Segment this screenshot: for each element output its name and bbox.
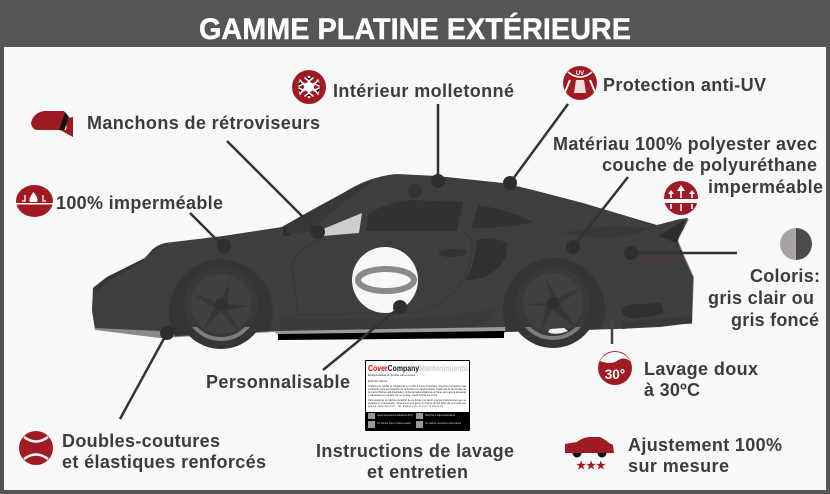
icon: 30 degree wash: 30°: [605, 367, 625, 382]
car illustration: [92, 174, 694, 364]
leader line: lavage: [611, 320, 613, 344]
label: instructions: [316, 441, 514, 482]
icon: reinforced double stitching: [19, 431, 53, 465]
care instructions card: [365, 360, 470, 431]
icon: snowflake: [292, 70, 326, 104]
care instructions card: plena satisfacción. El Equipo de Cover Company: [368, 405, 444, 408]
label: matériau: [553, 134, 823, 197]
label: matériau: imperméable: [708, 177, 823, 197]
door window: [366, 200, 463, 231]
care instructions card: Estimado Cliente,: [368, 380, 388, 383]
label: protection: Protection anti-UV: [603, 75, 766, 95]
icon: 30 degree wash: [598, 351, 632, 385]
door outline: [292, 232, 472, 315]
quarter window: [323, 213, 362, 236]
label: matériau: couche de polyuréthane: [602, 155, 817, 175]
icon: fitted car with stars: [565, 437, 614, 472]
label: matériau: Matériau 100% polyester avec: [553, 134, 817, 154]
label: ajustement: sur mesure: [628, 456, 729, 476]
care instructions card: exclusivos para la protección de vehículos es nuestra pasión. Cada una de las fundas de: [368, 388, 467, 391]
leader line: intérieur: [408, 104, 445, 198]
label: instructions: Instructions de lavage: [316, 441, 514, 461]
care instructions card: CoverCompanyMantenimiento: [368, 363, 468, 373]
label: lavage: Lavage doux: [644, 359, 758, 379]
tail lamp: [637, 250, 682, 262]
label: coloris: gris clair ou: [708, 288, 814, 308]
logo badge: [352, 247, 418, 313]
label: manchons: Manchons de rétroviseurs: [87, 113, 320, 133]
leader line: coutures: [120, 326, 174, 419]
rear wheel: [518, 273, 590, 348]
label: lavage: à 30ºC: [644, 380, 700, 400]
label: coloris: [708, 266, 820, 330]
care instructions card: Planchar a baja temperatura: [425, 414, 456, 417]
leader line: personnalisable: [323, 300, 407, 370]
side skirt: [276, 327, 505, 340]
leader line: anti-UV: [503, 104, 568, 190]
leader line: rétroviseurs: [227, 141, 325, 239]
title: GAMME PLATINE EXTÉRIEURE: [199, 12, 631, 46]
label: imperméable: 100% imperméable: [56, 193, 223, 213]
leader line: imperméable: [190, 213, 231, 253]
label: coloris: gris foncé: [731, 310, 819, 330]
care instructions card: No utilizar lejía ni blanqueador: [377, 422, 411, 425]
care instructions card: No utilizar secadora automática: [425, 422, 462, 425]
care instructions card: y adaptada al modelo de su coche. Cada funda es única.: [368, 394, 438, 397]
label: ajustement: Ajustement 100%: [628, 435, 782, 455]
rear side window: [472, 205, 533, 228]
icon: waterproof drop: [16, 185, 53, 217]
care instructions card: Para asegurar la máxima duración de su funda, por favor siga las instrucciones que se: [368, 399, 467, 402]
care instructions card: la Gama Platino está diseñada y confeccionada totalmente a mano, de manera artesanal: [368, 391, 466, 394]
icon: breathable membrane: [664, 181, 698, 215]
label: ajustement: [628, 435, 782, 476]
leader line: coloris: [624, 246, 737, 260]
leader line: matériau: [566, 177, 628, 254]
icon: fitted car with stars: ★★★: [576, 460, 606, 472]
care instructions card: Lavar únicamente a máquina a 30°C: [377, 414, 413, 417]
label: instructions: et entretien: [367, 462, 468, 482]
icon: UV protection: UV: [576, 71, 584, 77]
front wheel: [189, 259, 256, 349]
label: intérieur: Intérieur molletonné: [333, 81, 514, 101]
icon: mirror: [31, 111, 73, 137]
label: doubles-coutures: et élastiques renforcés: [62, 452, 266, 472]
rear bumper vent: [622, 303, 664, 318]
icon: UV protection: [563, 66, 597, 100]
care instructions card: Gracias por confiar el cuidado de su coche a Cover Company. Crear los productos más: [368, 385, 467, 388]
label: lavage: [644, 359, 758, 400]
care instructions card: El Especialista en fundas para coches: [368, 373, 416, 377]
care instructions card: detallan a continuación. Deseamos que goce a lo largo de los años de su funda con: [368, 402, 467, 405]
label: doubles-coutures: [62, 431, 266, 472]
label: doubles-coutures: Doubles-coutures: [62, 431, 220, 451]
label: coloris: Coloris:: [750, 266, 820, 286]
side vent: [466, 239, 507, 280]
label: personnalisable: Personnalisable: [206, 372, 350, 392]
icon: colour swatch: [780, 228, 812, 260]
